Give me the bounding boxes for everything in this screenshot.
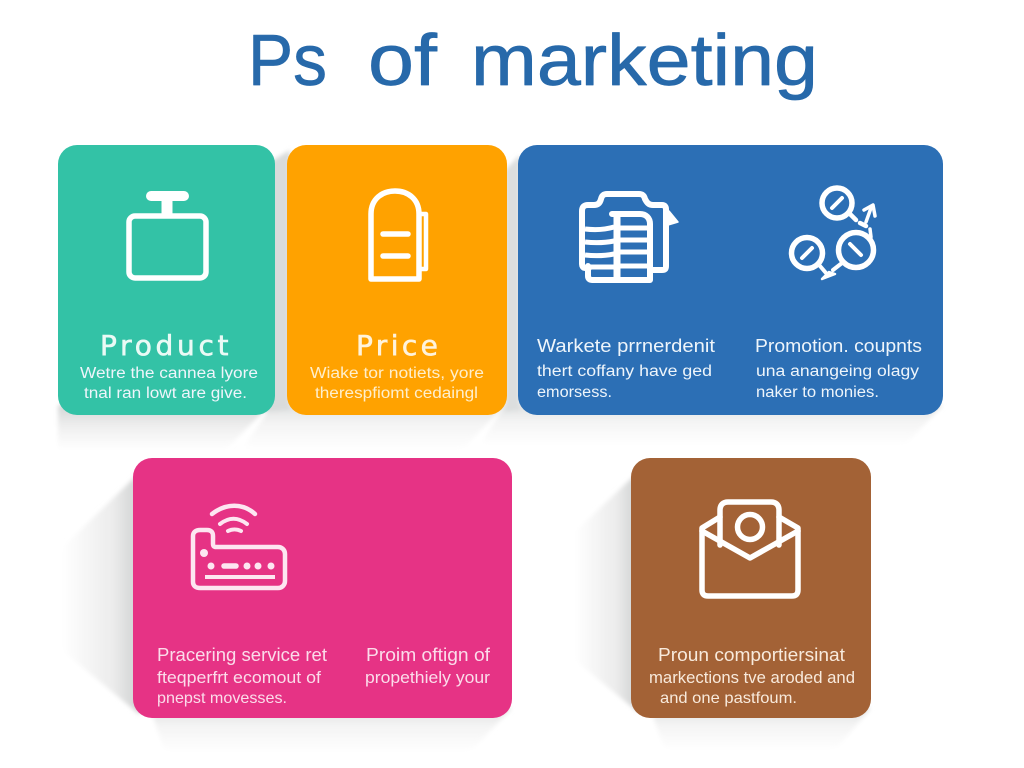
place description [537,336,715,401]
price description [310,365,484,402]
icon: envelope [702,502,798,596]
place description: Warkete prrnerdenit [537,336,715,356]
product description: tnal ran lowt are give. [84,385,247,402]
product description: Wetre the cannea lyore [80,365,258,382]
price heading: Price [356,329,441,362]
product card background [58,145,275,415]
title [248,21,818,101]
icon: promotion coupons [792,188,875,279]
price description: Wiake tor notiets, yore [310,365,484,382]
icon: wifi router [193,506,285,588]
price card background [287,145,507,415]
title: Ps [248,21,327,101]
place description: emorsess. [537,384,612,401]
panel: price [287,145,507,415]
promotion description: naker to monies. [756,384,879,401]
pink card background [133,458,512,718]
title: of [368,21,438,101]
service description: pnepst movesses. [157,690,287,707]
panel: email [631,458,871,718]
brown card background [631,458,871,718]
email description: markections tve aroded and [649,668,855,687]
email description: Proun comportiersinat [658,645,845,665]
promotion description: una anangeing olagy [756,363,919,380]
promotion description [755,336,922,401]
panel: place and promotion [518,145,943,415]
email description [649,645,855,707]
service secondary description: propethiely your [365,668,490,687]
product description [80,365,258,402]
icon: product box [129,196,206,278]
service description: Pracering service ret [157,645,327,665]
price description: therespfiomt cedaingl [315,385,478,402]
email description: and one pastfoum. [660,690,797,707]
promotion description: Promotion. coupnts [755,336,922,356]
panel: product [58,145,275,415]
place description: thert coffany have ged [537,363,712,380]
service secondary description: Proim oftign of [366,645,491,665]
service secondary description [365,645,491,687]
panel: service [133,458,512,718]
product heading: Product [100,329,232,362]
title: marketing [471,21,818,101]
service description: fteqperfrt ecomout of [157,668,321,687]
icon: price tag [371,191,426,279]
blue card background [518,145,943,415]
icon: document [582,194,678,280]
service description [157,645,327,707]
